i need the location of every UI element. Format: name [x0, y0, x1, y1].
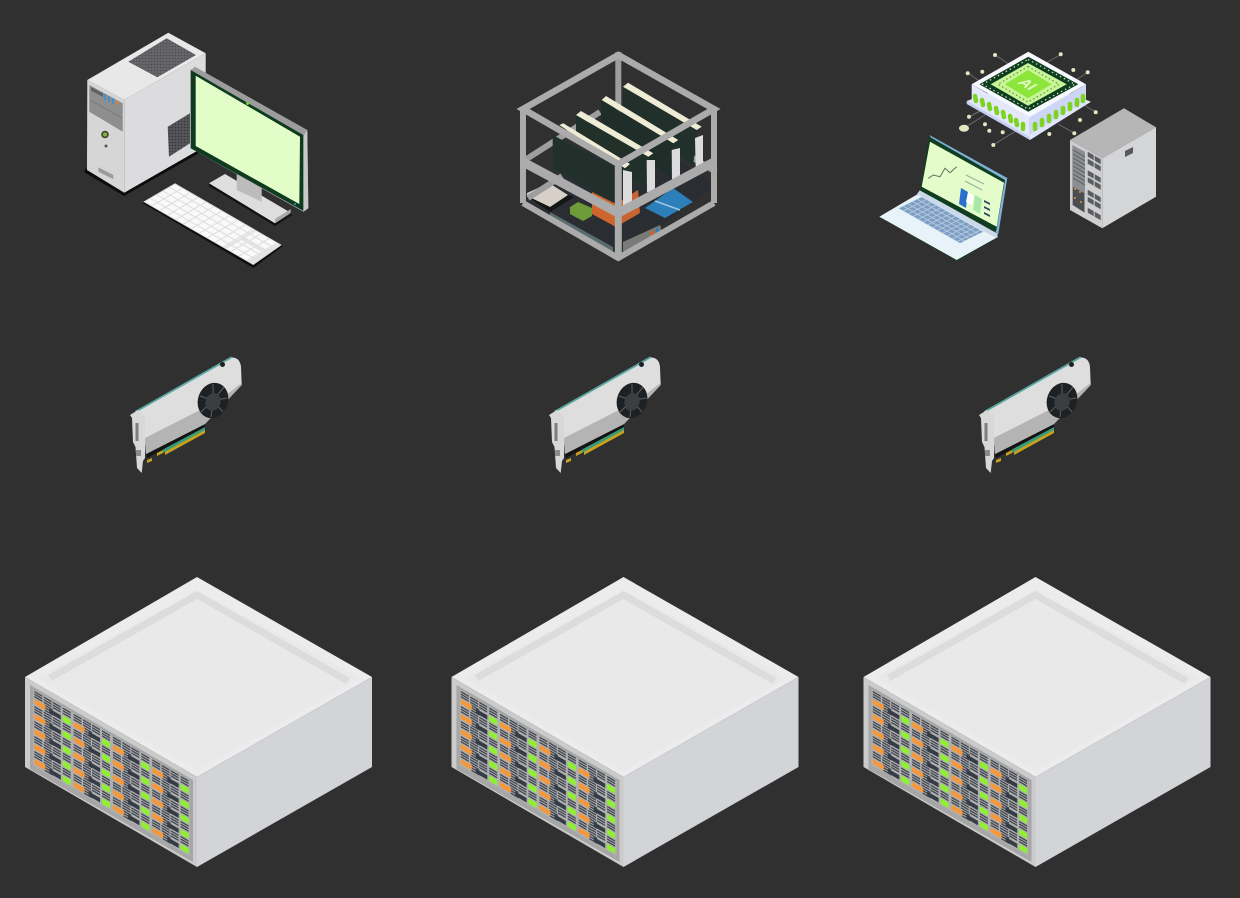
server tower [1070, 108, 1156, 228]
monitor base [209, 172, 292, 226]
icon: open-frame mining rig [523, 52, 716, 259]
icon: graphics card 3 [979, 356, 1091, 473]
chip body [967, 52, 1091, 140]
tower case [84, 33, 208, 196]
chip traces [964, 55, 1096, 145]
icon: server unit 3 [864, 577, 1210, 867]
keyboard [143, 183, 283, 268]
icon: server unit 2 [452, 577, 798, 867]
graphics cards [553, 83, 703, 207]
monitor screen [191, 67, 308, 212]
icon: desktop computer with monitor and keyboard [84, 33, 308, 268]
icon: graphics card 1 [130, 356, 242, 473]
chip label: AI [1013, 76, 1041, 93]
chip pins [975, 96, 1083, 129]
front frame [523, 55, 714, 259]
laptop [879, 135, 1007, 261]
chip trace dots [959, 52, 1098, 147]
icon: AI chip with laptop and server [879, 52, 1156, 261]
icon: server unit 1 [25, 577, 372, 867]
icon: graphics card 2 [549, 356, 661, 473]
motherboard and components [524, 120, 716, 258]
rear frame [525, 52, 716, 198]
